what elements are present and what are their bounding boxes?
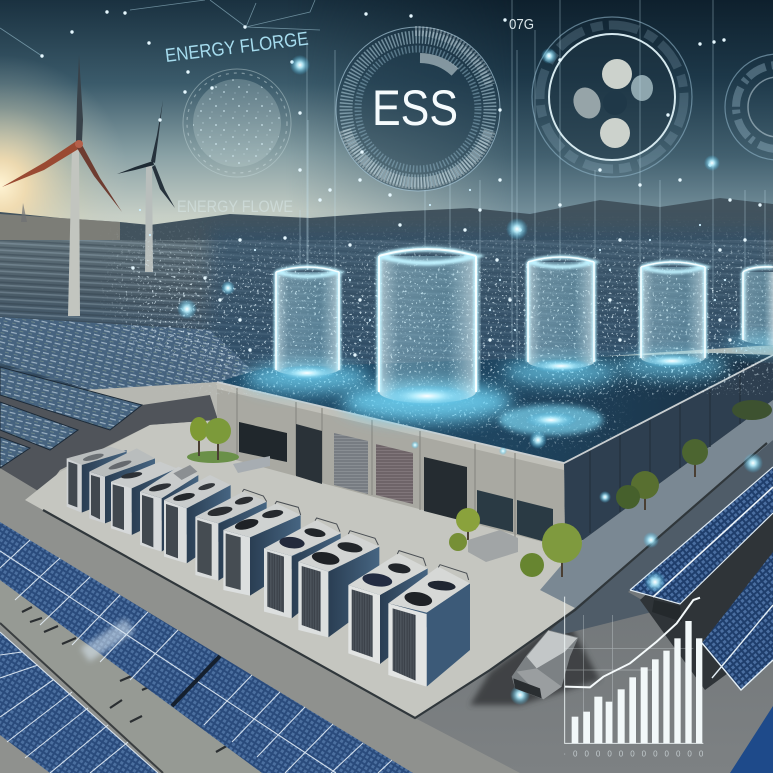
distant wind turbine bbox=[21, 203, 27, 222]
delivery truck bbox=[512, 630, 578, 699]
dark road on right bbox=[415, 450, 773, 773]
holographic device ring bbox=[532, 17, 692, 177]
pad edge line bbox=[43, 443, 767, 718]
wind turbine small bbox=[117, 100, 175, 272]
energy cylinder 1 bbox=[245, 267, 369, 393]
hazy left horizon bbox=[0, 214, 120, 240]
battery unit 7 bbox=[223, 501, 301, 596]
building bbox=[217, 353, 773, 548]
energy cylinder 4 bbox=[616, 262, 728, 378]
battery unit 8 bbox=[264, 518, 341, 618]
disc left bbox=[568, 83, 606, 123]
background: night-to-dusk sky bbox=[0, 0, 773, 225]
energy cylinder 3 bbox=[503, 257, 619, 385]
data particle field bbox=[100, 215, 773, 395]
holographic globe bbox=[183, 69, 291, 177]
concrete pad bbox=[25, 420, 583, 718]
ESS label: ESS bbox=[372, 80, 458, 136]
grey walkway by right wall bbox=[540, 400, 773, 608]
battery unit 3 bbox=[111, 462, 177, 535]
heading: energy forge: ENERGY FLORGE bbox=[164, 29, 310, 67]
chart axes bbox=[565, 597, 703, 743]
energy cylinder 5 bbox=[727, 267, 773, 354]
trend line bbox=[565, 598, 700, 687]
battery unit 10 bbox=[348, 551, 428, 664]
roll door one bbox=[334, 433, 368, 494]
vertical light beams bbox=[300, 0, 765, 380]
battery unit 1 bbox=[67, 447, 127, 513]
battery units row bbox=[67, 447, 470, 687]
mid solar field rows bbox=[0, 317, 257, 405]
roof sparkle bbox=[234, 353, 758, 453]
door three bbox=[424, 457, 467, 522]
number label: 07G bbox=[509, 16, 534, 33]
wind turbine large bbox=[2, 55, 122, 316]
glow pool on roof bbox=[499, 405, 603, 449]
road band beneath the pad bbox=[0, 460, 773, 773]
holographic ring right bbox=[725, 54, 773, 160]
caption: energy flow: ENERGY FLOWE bbox=[177, 197, 293, 216]
window block two bbox=[477, 490, 513, 532]
chart bars bbox=[572, 621, 702, 743]
disc right bbox=[631, 75, 653, 101]
left solar panels bbox=[0, 367, 142, 468]
dark shadow near truck bbox=[470, 615, 600, 705]
battery unit 5 bbox=[164, 475, 231, 563]
planter strip and trees bbox=[187, 400, 772, 577]
battery unit 9 bbox=[298, 531, 379, 637]
door one bbox=[296, 424, 322, 484]
bluish service road bbox=[540, 440, 773, 640]
distant solar field bbox=[0, 228, 773, 390]
dark asphalt bottom right bbox=[640, 480, 773, 690]
bottom-left long solar panel band bbox=[0, 522, 413, 773]
roof bbox=[217, 353, 773, 463]
chart axis labels: · 0 0 0 0 0 0 0 0 0 0 0 0 bbox=[563, 750, 704, 759]
window block bbox=[239, 422, 287, 462]
distant mountains bbox=[0, 198, 773, 262]
battery unit 4 bbox=[140, 465, 198, 552]
energy cylinder 2 bbox=[342, 249, 512, 422]
battery unit 11 bbox=[388, 565, 470, 687]
network lines bbox=[0, 0, 320, 56]
bar chart overlay bbox=[563, 597, 704, 759]
disc centre bbox=[603, 91, 627, 115]
bottom-left lower solar panel band bbox=[0, 632, 158, 773]
window block three bbox=[517, 500, 553, 544]
disc bottom bbox=[600, 118, 630, 148]
battery unit 6 bbox=[195, 489, 267, 581]
holographic ESS ring bbox=[336, 27, 500, 191]
battery unit 2 bbox=[89, 448, 155, 523]
roll door two bbox=[376, 444, 413, 504]
ground concrete bbox=[0, 345, 773, 773]
building right wall bbox=[564, 355, 773, 548]
right solar panels bbox=[630, 467, 773, 773]
shadowed ground beneath left panels bbox=[0, 395, 218, 497]
building front wall bbox=[217, 382, 565, 548]
disc top bbox=[602, 59, 632, 89]
